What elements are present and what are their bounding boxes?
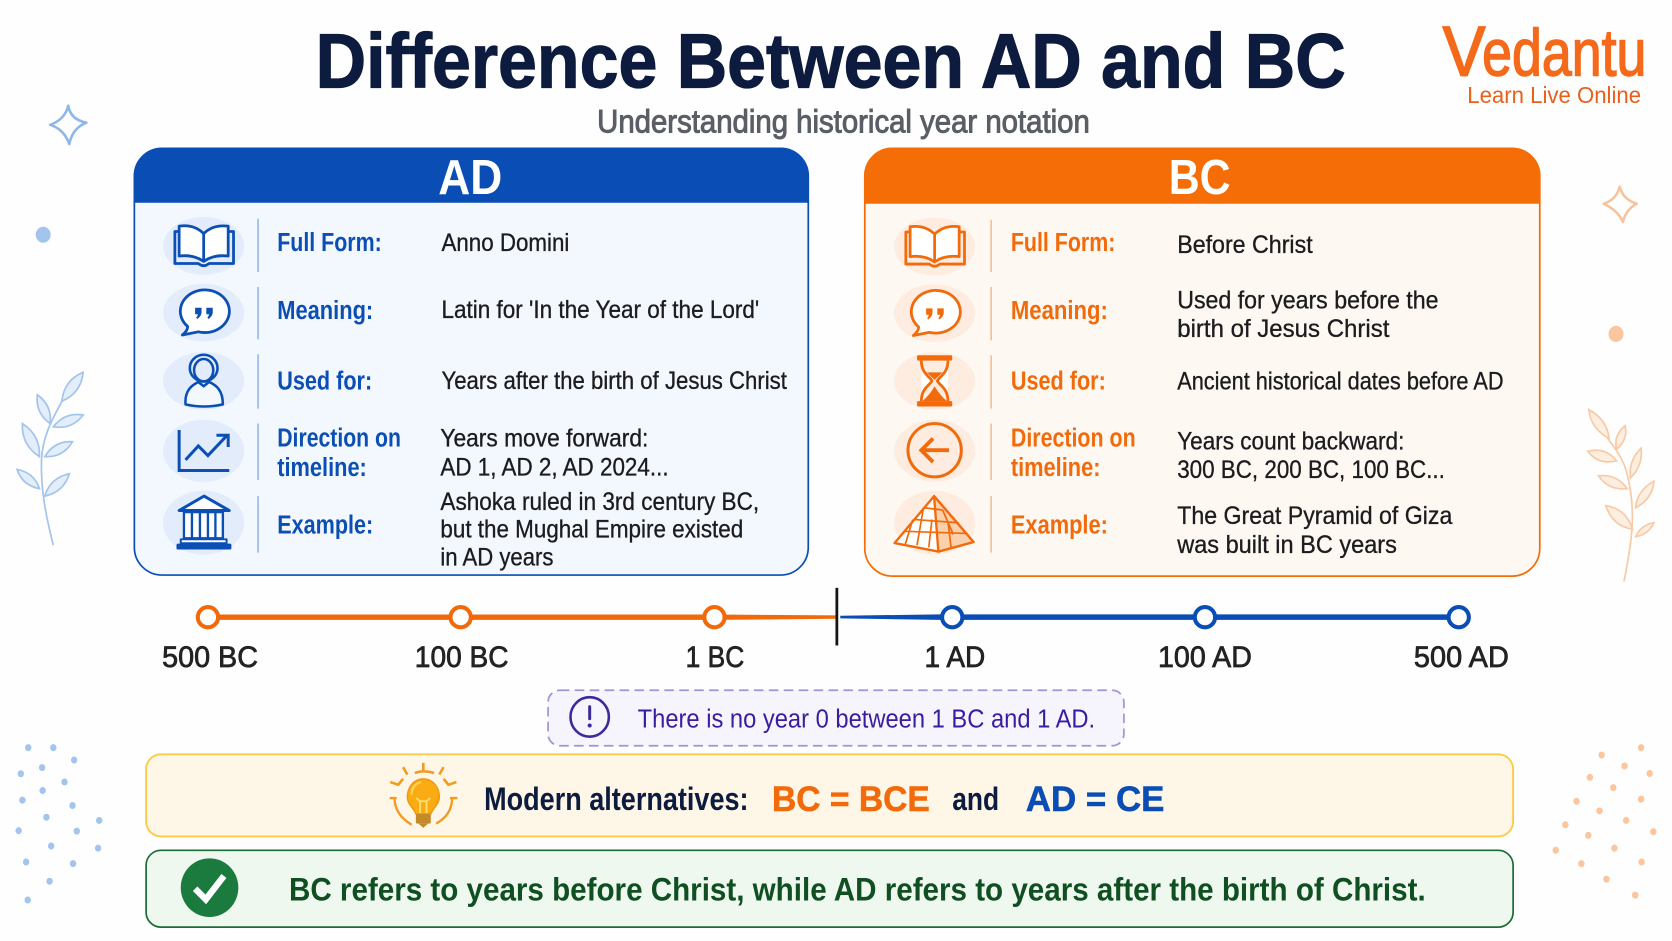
row: Example: Example: — [1011, 509, 1108, 539]
row: Example: but the Mughal Empire existed — [440, 517, 743, 544]
icon: speech bubble with quotes — [911, 290, 960, 336]
row: Direction on timeline: timeline: — [277, 452, 367, 482]
year zero divider — [835, 588, 838, 645]
timeline — [162, 588, 1509, 674]
row: Used for: Years after the birth of Jesus Christ — [441, 368, 787, 395]
icon: rising chart — [179, 430, 229, 470]
subtitle: Understanding historical year notation — [597, 103, 1090, 139]
row: Meaning: Used for years before the — [1177, 287, 1438, 314]
panel: AD — [134, 148, 809, 575]
icon: check mark — [181, 858, 238, 917]
timeline labels: 500 AD — [1414, 641, 1509, 674]
icon: light bulb — [390, 763, 457, 828]
BC markers — [198, 607, 725, 627]
row: Example: in AD years — [440, 544, 553, 571]
row: Full Form: Full Form: — [1011, 227, 1115, 257]
banner: summary — [146, 850, 1513, 927]
row: Meaning — [1011, 287, 1438, 343]
icon: speech bubble with quotes — [180, 290, 229, 335]
AD segment — [840, 614, 1459, 620]
row: Example: Ashoka ruled in 3rd century BC, — [440, 489, 759, 516]
icon: open book — [175, 226, 234, 266]
row: Example — [1011, 503, 1453, 559]
timeline labels — [162, 641, 1509, 674]
row: Direction on timeline: Direction on — [277, 422, 401, 452]
AD markers — [942, 607, 1469, 627]
icon: exclamation — [570, 697, 609, 737]
timeline labels: 500 BC — [162, 641, 258, 674]
title: Difference Between AD and BC — [316, 18, 1346, 104]
row: Full Form: Anno Domini — [441, 230, 569, 257]
row: Used for: Ancient historical dates before AD — [1177, 368, 1504, 395]
row: Full Form — [277, 227, 569, 257]
decoration: orange dots — [1553, 744, 1657, 899]
row: Direction on timeline — [1011, 422, 1445, 484]
row: Meaning: Meaning: — [1011, 295, 1108, 325]
decoration: orange dot — [1609, 326, 1623, 342]
row: Example: The Great Pyramid of Giza — [1177, 503, 1453, 530]
BC heading: BC — [1169, 151, 1231, 205]
row: Full Form: Before Christ — [1177, 232, 1313, 259]
row: Example: Example: — [277, 509, 373, 539]
row: Direction on timeline: AD 1, AD 2, AD 2024... — [440, 454, 669, 481]
row dividers — [990, 220, 992, 553]
decoration: blue dots — [15, 744, 102, 904]
row: Used for — [1011, 365, 1504, 395]
callout: no year 0 — [548, 690, 1124, 746]
row: Used for — [277, 365, 787, 395]
row: Meaning: birth of Jesus Christ — [1177, 316, 1390, 343]
decoration: blue leaf branch — [17, 372, 83, 545]
icon backgrounds — [894, 218, 975, 555]
callout: no year 0: There is no year 0 between 1 BC and 1 AD. — [638, 706, 1095, 734]
logo: Vedantu: V — [1443, 12, 1485, 91]
BC segment — [208, 615, 837, 620]
icon: classical building — [177, 496, 231, 549]
panel: BC — [864, 148, 1540, 576]
banner: modern alternatives: and — [952, 781, 999, 817]
row: Used for: Used for: — [1011, 365, 1106, 395]
timeline labels: 100 BC — [415, 641, 509, 674]
decoration: blue star — [50, 106, 86, 144]
decoration: blue dot — [36, 227, 51, 243]
row: Meaning: Meaning: — [277, 295, 373, 325]
decoration: orange leaf branch — [1588, 410, 1654, 581]
logo: Vedantu: Learn Live Online — [1467, 82, 1641, 108]
timeline labels: 1 AD — [925, 641, 985, 674]
timeline labels: 100 AD — [1158, 641, 1252, 674]
AD heading: AD — [438, 151, 502, 205]
decoration: orange star — [1604, 187, 1637, 222]
icon backgrounds — [163, 217, 244, 555]
row: Direction on timeline: Direction on — [1011, 422, 1136, 452]
row: Example: was built in BC years — [1176, 532, 1397, 559]
icon: hourglass — [917, 355, 952, 406]
row dividers — [257, 219, 259, 553]
icon: pyramid — [895, 496, 974, 552]
timeline labels: 1 BC — [686, 641, 744, 674]
row: Meaning — [277, 295, 759, 325]
icon: person with halo — [185, 355, 223, 406]
banner: summary: BC refers to years before Christ, while AD refers to years after the birth of Christ. — [289, 871, 1426, 907]
row: Meaning: Latin for 'In the Year of the Lord' — [441, 297, 759, 324]
row: Used for: Used for: — [277, 365, 372, 395]
row: Direction on timeline — [277, 422, 669, 482]
row: Direction on timeline: Years count backward: — [1177, 429, 1404, 456]
banner: modern alternatives: BC = BCE — [772, 780, 930, 819]
row: Full Form — [1011, 227, 1313, 259]
logo: Vedantu — [1443, 12, 1646, 108]
row: Direction on timeline: timeline: — [1011, 452, 1100, 482]
row: Direction on timeline: 300 BC, 200 BC, 100 BC... — [1177, 457, 1445, 484]
icon: back arrow in circle — [908, 424, 961, 477]
icon: open book — [906, 226, 964, 266]
banner: modern alternatives: Modern alternatives: — [484, 781, 749, 817]
banner: modern alternatives — [146, 754, 1513, 836]
row: Direction on timeline: Years move forward: — [440, 425, 648, 452]
row: Example — [277, 489, 759, 571]
banner: modern alternatives: AD = CE — [1026, 780, 1164, 819]
row: Full Form: Full Form: — [277, 227, 382, 257]
